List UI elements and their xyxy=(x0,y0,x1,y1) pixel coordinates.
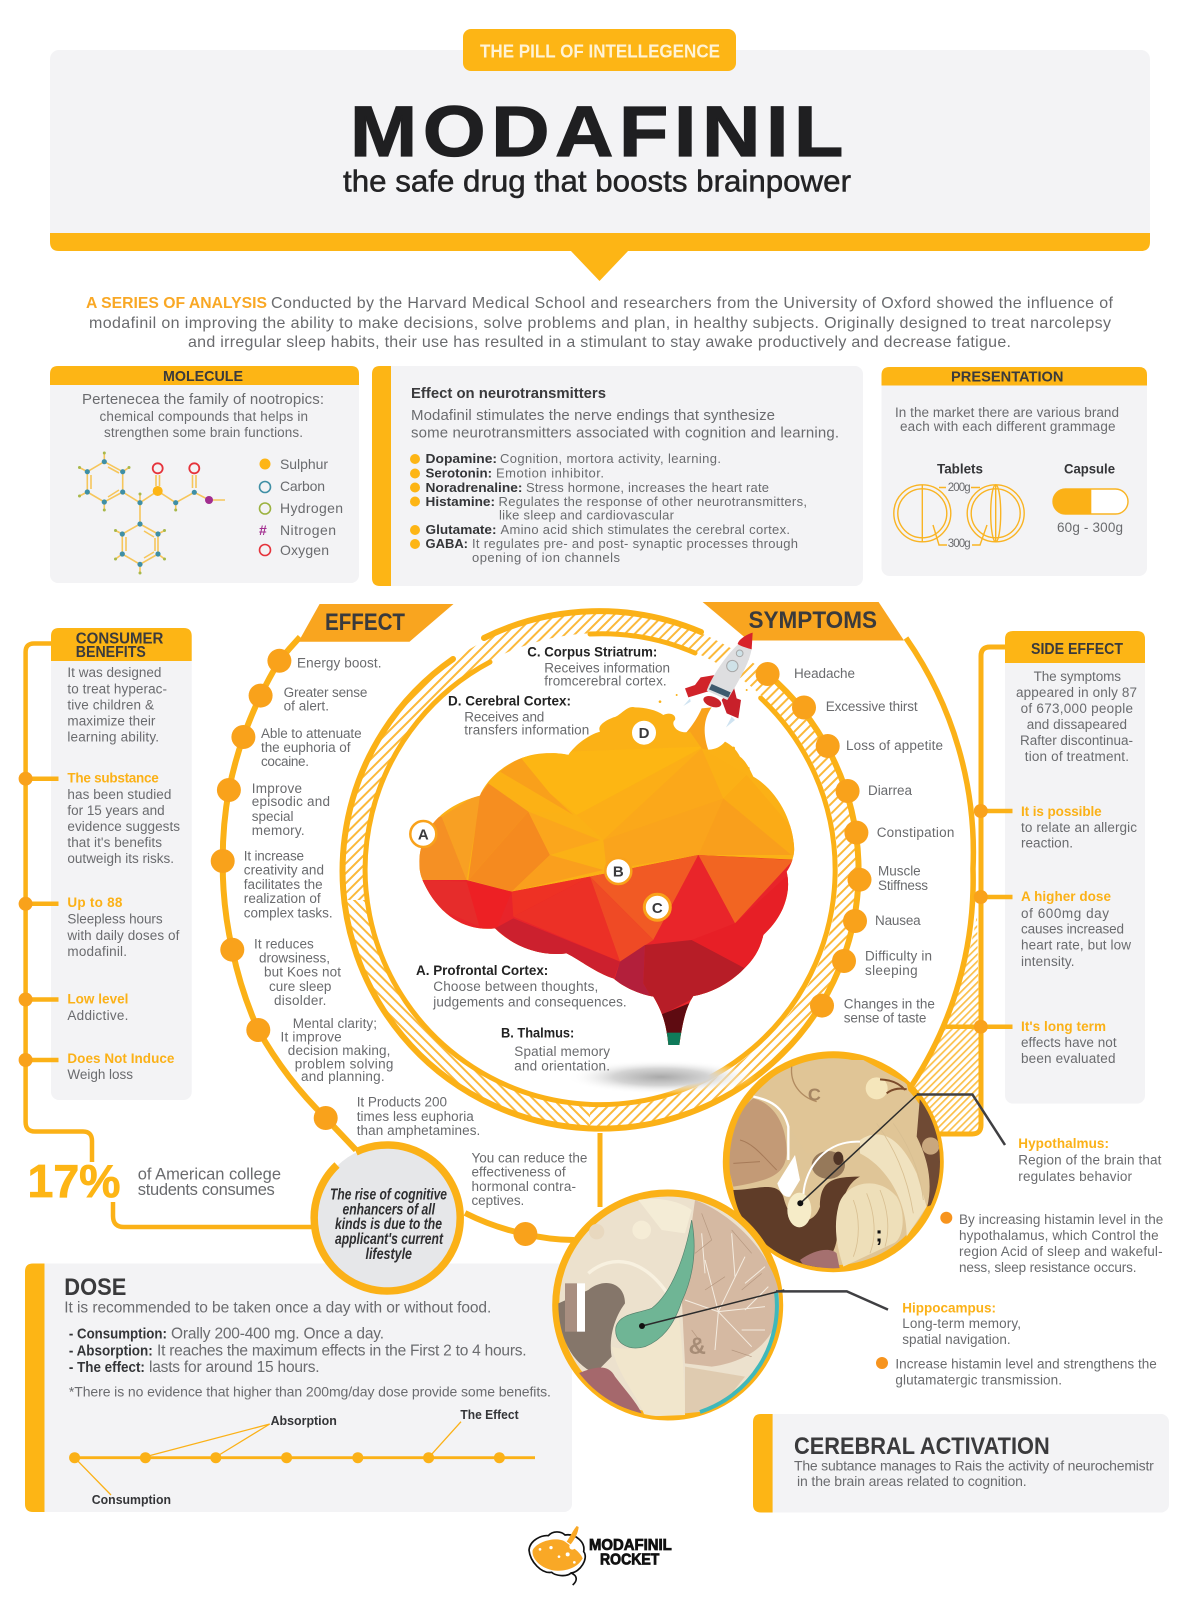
effect connector and dots xyxy=(211,637,356,1150)
neurotransmitter list: It regulates pre- and post- synaptic processes through xyxy=(472,536,798,551)
panel: presentation: 200g xyxy=(948,482,971,494)
symptom dots xyxy=(756,662,872,1018)
panel: consumer benefits: for 15 years and xyxy=(67,803,165,818)
panel: consumer benefits xyxy=(19,628,192,1162)
effect labels: drowsiness, xyxy=(259,951,330,966)
effect labels: and planning. xyxy=(301,1069,385,1084)
neurotransmitter list xyxy=(410,451,807,565)
panel: molecule: Pertenecea the family of nootropics: xyxy=(82,391,324,408)
neurotransmitter list: Dopamine: xyxy=(426,451,497,466)
effect labels xyxy=(244,656,480,1138)
panel: consumer benefits: learning ability. xyxy=(67,730,159,744)
icon: tablets xyxy=(894,485,1024,545)
panel: side effect: The symptoms xyxy=(1034,669,1121,684)
effect labels: It Products 200 xyxy=(357,1095,447,1110)
panel: presentation: 300g xyxy=(948,538,971,550)
illustration: hippocampus slice: & xyxy=(689,1333,706,1360)
neurotransmitter list: Stress hormone, increases the heart rate xyxy=(526,480,769,495)
brain shadow xyxy=(566,1060,756,1094)
brain markers A B C D: D xyxy=(639,725,650,742)
timeline: benefits connector xyxy=(19,644,92,1162)
panel: cerebral activation: in the brain areas related to cognition. xyxy=(797,1473,1027,1489)
panel: side effect: reaction. xyxy=(1021,836,1073,851)
panel: consumer benefits: Low level xyxy=(67,992,128,1007)
symptom labels: Loss of appetite xyxy=(846,738,943,753)
molecule legend: # xyxy=(259,522,267,538)
brain region labels: Spatial memory xyxy=(514,1044,610,1059)
panel: consumer benefits: to treat hyperac- xyxy=(67,681,167,696)
dose timeline chart: The Effect xyxy=(460,1408,519,1422)
callout: rise of cognitive enhancers: lifestyle xyxy=(366,1246,412,1263)
effect labels: It increase xyxy=(244,849,304,864)
effect labels: special xyxy=(252,809,294,824)
stat: 17 percent: of American college xyxy=(138,1165,281,1183)
panel: header xyxy=(50,29,1150,281)
text: hypothalamus: Region of the brain that xyxy=(1018,1153,1162,1168)
neurotransmitter list: Regulates the response of other neurotransmitters, xyxy=(498,494,807,509)
panel: presentation: PRESENTATION xyxy=(951,368,1064,386)
panel: side effect: been evaluated xyxy=(1021,1051,1116,1066)
text: hippocampus: Increase histamin level and strengthens the xyxy=(895,1357,1157,1372)
effect labels: memory. xyxy=(252,823,305,838)
panel: side effect: A higher dose xyxy=(1021,889,1111,904)
effect labels: Improve xyxy=(252,781,302,796)
panel: effect on neurotransmitters: Modafinil stimulates the nerve endings that synthesize xyxy=(411,407,775,424)
text: hypothalamus: regulates behavior xyxy=(1018,1169,1132,1184)
callout: rise of cognitive enhancers: applicant's current xyxy=(335,1231,444,1248)
panel: consumer benefits: modafinil. xyxy=(67,944,127,959)
intro paragraph: Conducted by the Harvard Medical School and researchers from the University of Oxford showed the influence of xyxy=(271,295,1114,312)
neurotransmitter list: Amino acid shich stimulates the cerebral cortex. xyxy=(500,522,790,537)
neurotransmitter list: opening of ion channels xyxy=(472,550,620,565)
symptom labels: Constipation xyxy=(877,825,954,840)
symptom labels: sense of taste xyxy=(844,1010,926,1026)
molecule legend: Sulphur xyxy=(280,456,328,472)
panel: presentation: Capsule xyxy=(1064,462,1115,476)
effect labels: creativity and xyxy=(244,863,324,878)
note: hormonal contraceptives: ceptives. xyxy=(472,1193,524,1208)
text: hypothalamus: By increasing histamin level in the xyxy=(959,1212,1163,1227)
timeline: side effect branches xyxy=(946,804,1012,1034)
effect labels: than amphetamines. xyxy=(357,1123,480,1138)
panel: side effect: appeared in only 87 xyxy=(1016,685,1137,700)
panel: consumer benefits: tive children & xyxy=(67,697,154,712)
text: hippocampus: spatial navigation. xyxy=(902,1332,1011,1347)
intro paragraph xyxy=(86,295,1114,351)
neurotransmitter list: Histamine: xyxy=(426,494,495,509)
brain region labels: and orientation. xyxy=(514,1059,610,1074)
callout: rise of cognitive enhancers: The rise of cognitive xyxy=(330,1186,447,1203)
dose timeline chart: Consumption xyxy=(92,1493,171,1507)
brain region labels: transfers information xyxy=(464,722,589,737)
effect labels: It improve xyxy=(280,1030,342,1045)
panel: effect on neurotransmitters: Effect on neurotransmitters xyxy=(411,386,606,402)
neurotransmitter list: like sleep and cardiovascular xyxy=(499,508,675,523)
panel: dose: - Consumption: xyxy=(69,1326,167,1343)
panel: consumer benefits: It was designed xyxy=(67,665,161,680)
effect labels: Able to attenuate xyxy=(261,726,362,741)
panel: dose: lasts for around 15 hours. xyxy=(149,1359,320,1376)
icon: rocket xyxy=(683,633,753,727)
note: hormonal contraceptives: You can reduce the xyxy=(472,1151,587,1166)
text: hypothalamus: Hypothalmus: xyxy=(1018,1136,1109,1151)
leader line: hippocampus xyxy=(776,1291,888,1310)
neurotransmitter list: Noradrenaline: xyxy=(426,480,522,495)
brain region labels: C. Corpus Striatrum: xyxy=(527,644,657,660)
intro paragraph: and irregular sleep habits, their use has resulted in a stimulant to stay awake productively and decrease fatigue. xyxy=(188,334,1011,351)
effect labels: of alert. xyxy=(284,698,329,714)
symptom labels: Nausea xyxy=(875,913,921,928)
panel: side effect: effects have not xyxy=(1021,1035,1117,1050)
neurotransmitter list: Serotonin: xyxy=(426,466,492,481)
effect labels: times less euphoria xyxy=(357,1109,474,1124)
panel: consumer benefits: BENEFITS xyxy=(76,644,146,661)
brain region labels: A. Profrontal Cortex: xyxy=(416,962,548,978)
logo: modafinil rocket: MODAFINIL xyxy=(589,1537,672,1554)
panel: side effect: It's long term xyxy=(1021,1019,1106,1034)
brain markers A B C D: B xyxy=(613,864,624,880)
text: hypothalamus: region Acid of sleep and wakeful- xyxy=(959,1244,1163,1259)
dose timeline chart xyxy=(69,1408,535,1507)
panel: consumer benefits: outweigh its risks. xyxy=(67,851,174,866)
subtitle: the safe drug that boosts brainpower xyxy=(343,164,851,198)
symptom labels: Muscle xyxy=(878,864,921,878)
panel: side effect xyxy=(946,631,1145,1104)
effect labels: cure sleep xyxy=(269,979,331,994)
panel: dose: DOSE xyxy=(64,1274,126,1301)
panel: dose: *There is no evidence that higher than 200mg/day dose provide some benefits. xyxy=(69,1384,551,1400)
panel: consumer benefits: Weigh loss xyxy=(67,1067,133,1082)
brain markers A B C D: C xyxy=(652,900,663,917)
symptom labels: Difficulty in xyxy=(865,948,932,964)
panel: side effect: Rafter discontinua- xyxy=(1020,733,1133,748)
illustration: hypothalamus slice xyxy=(726,1055,944,1270)
effect labels: Mental clarity; xyxy=(293,1016,377,1031)
brain region labels: Choose between thoughts, xyxy=(433,979,598,994)
panel: side effect: tion of treatment. xyxy=(1025,749,1129,764)
effect labels: realization of xyxy=(244,891,321,906)
symptom labels: Changes in the xyxy=(844,997,935,1012)
panel: side effect: and dissapeared xyxy=(1027,717,1127,732)
effect labels: It reduces xyxy=(254,937,314,952)
title: MODAFINIL xyxy=(350,93,849,172)
panel: dose: - Absorption: xyxy=(69,1342,153,1359)
stat: 17 percent: students consumes xyxy=(138,1181,275,1199)
brain region labels: B. Thalmus: xyxy=(501,1025,574,1041)
effect labels: but Koes not xyxy=(264,964,341,980)
panel: presentation: 60g - 300g xyxy=(1057,520,1123,535)
effect labels: disolder. xyxy=(274,993,326,1008)
symptoms outer connector and hatch xyxy=(906,638,1005,1134)
panel: effect on neurotransmitters xyxy=(372,366,863,586)
panel: side effect: causes increased xyxy=(1021,922,1124,937)
text: hypothalamus: ness, sleep resistance occurs. xyxy=(959,1260,1136,1275)
logo: modafinil rocket xyxy=(529,1526,672,1585)
panel: consumer benefits: Does Not Induce xyxy=(67,1051,175,1066)
panel: side effect: intensity. xyxy=(1021,954,1074,969)
panel: cerebral activation: CEREBRAL ACTIVATION xyxy=(794,1433,1050,1460)
panel: consumer benefits: Addictive. xyxy=(67,1008,128,1023)
symptom labels: Stiffness xyxy=(878,878,928,893)
panel: side effect: heart rate, but low xyxy=(1021,938,1131,953)
effect labels: complex tasks. xyxy=(244,906,333,921)
panel: dose: Orally 200-400 mg. Once a day. xyxy=(171,1326,384,1343)
panel: molecule: strengthen some brain functions. xyxy=(104,425,303,440)
stat: 17 percent xyxy=(28,1155,315,1227)
text: hippocampus: Long-term memory, xyxy=(902,1316,1021,1331)
intro paragraph: modafinil on improving the ability to make decisions, solve problems and plan, in healthy subjects. Originally designed to treat narcolepsy xyxy=(89,315,1111,332)
panel: presentation: each with each different grammage xyxy=(900,419,1116,434)
text: hippocampus xyxy=(876,1300,1157,1388)
tag: the pill of intellegence: THE PILL OF INTELLEGENCE xyxy=(480,40,720,62)
effect labels: problem solving xyxy=(295,1056,393,1071)
illustration: hypothalamus slice: ; xyxy=(875,1222,883,1247)
panel: molecule: MOLECULE xyxy=(163,368,243,385)
tag: the pill of intellegence xyxy=(463,29,736,71)
panel: dose: It reaches the maximum effects in the First 2 to 4 hours. xyxy=(157,1342,527,1359)
panel: molecule: chemical compounds that helps in xyxy=(100,409,308,424)
effect labels: episodic and xyxy=(252,794,330,809)
effect labels: Greater sense xyxy=(284,685,367,700)
panel: consumer benefits: has been studied xyxy=(67,787,171,802)
neurotransmitter list: Cognition, mortora activity, learning. xyxy=(500,451,721,466)
callout: rise of cognitive enhancers: kinds is due to the xyxy=(335,1216,442,1233)
brain region labels: fromcerebral cortex. xyxy=(544,674,667,689)
symptom labels: Excessive thirst xyxy=(826,699,918,714)
lines to hormonal note and slice xyxy=(465,1133,600,1240)
brain region labels xyxy=(416,644,670,1074)
panel: effect on neurotransmitters: some neurotransmitters associated with cognition and learning. xyxy=(411,424,839,442)
panel: consumer benefits: with daily doses of xyxy=(66,928,180,943)
callout: rise of cognitive enhancers xyxy=(314,1145,461,1291)
brain region labels: judgements and consequences. xyxy=(432,995,627,1010)
dose timeline chart: Absorption xyxy=(271,1414,337,1428)
panel: dose: - The effect: xyxy=(69,1359,145,1376)
symptom labels: Headache xyxy=(794,666,855,681)
callout: rise of cognitive enhancers: enhancers of all xyxy=(342,1201,436,1218)
panel: cerebral activation xyxy=(753,1414,1169,1512)
panel: consumer benefits: Sleepless hours xyxy=(67,912,163,927)
text: hypothalamus: hypothalamus, which Control the xyxy=(959,1228,1159,1243)
brain region labels: D. Cerebral Cortex: xyxy=(448,693,571,709)
molecule legend: Carbon xyxy=(280,478,325,494)
text: hippocampus: glutamatergic transmission. xyxy=(895,1373,1062,1388)
brain markers A B C D: A xyxy=(418,826,429,844)
panel: presentation xyxy=(882,367,1147,576)
panel: side effect: SIDE EFFECT xyxy=(1031,641,1123,658)
neurotransmitter list: GABA: xyxy=(426,536,468,551)
text: hypothalamus xyxy=(940,1136,1163,1275)
illustration: hypothalamus slice: C xyxy=(808,1085,821,1105)
neurotransmitter list: Emotion inhibitor. xyxy=(496,466,604,481)
effect labels: facilitates the xyxy=(244,877,323,892)
panel: side effect: of 673,000 people xyxy=(1021,701,1133,716)
panel: side effect: to relate an allergic xyxy=(1021,820,1137,835)
panel: molecule xyxy=(50,366,359,583)
banner: symptoms: SYMPTOMS xyxy=(748,607,877,634)
note: hormonal contraceptives xyxy=(472,1151,587,1208)
panel: consumer benefits: evidence suggests xyxy=(67,819,180,834)
molecule legend: Oxygen xyxy=(280,542,329,558)
logo: modafinil rocket: ROCKET xyxy=(600,1551,660,1568)
panel: consumer benefits: Up to 88 xyxy=(67,895,123,910)
effect labels: the euphoria of xyxy=(261,740,351,755)
illustration: hippocampus slice xyxy=(556,1193,784,1417)
effect labels: decision making, xyxy=(288,1043,390,1058)
panel: presentation: Tablets xyxy=(937,462,983,476)
molecule diagram xyxy=(78,452,225,574)
banner: effect: EFFECT xyxy=(325,609,405,636)
leader line: hypothalamus xyxy=(917,1094,1005,1145)
neurotransmitter list: Glutamate: xyxy=(426,522,496,537)
panel: cerebral activation: The subtance manages to Rais the activity of neurochemistr xyxy=(794,1457,1154,1473)
panel: consumer benefits: that it's benefits xyxy=(67,835,162,850)
stat: 17 percent: 17% xyxy=(28,1155,120,1207)
panel: consumer benefits: CONSUMER xyxy=(76,631,164,648)
banner: effect xyxy=(298,604,454,642)
molecule legend: Hydrogen xyxy=(280,500,343,516)
banner: symptoms xyxy=(703,602,904,640)
panel: side effect: of 600mg day xyxy=(1021,906,1109,921)
note: hormonal contraceptives: hormonal contra- xyxy=(472,1179,576,1194)
effect labels: Energy boost. xyxy=(297,656,382,671)
effect labels: cocaine. xyxy=(261,754,309,769)
symptom labels: sleeping xyxy=(865,963,918,978)
panel: dose: It is recommended to be taken once a day with or without food. xyxy=(64,1300,491,1317)
molecule legend: Nitrogen xyxy=(280,522,336,538)
note: hormonal contraceptives: effectiveness of xyxy=(472,1165,566,1180)
rings: hatched circle around brain xyxy=(343,611,859,1129)
intro paragraph: A SERIES OF ANALYSIS xyxy=(86,295,267,312)
panel: presentation: In the market there are various brand xyxy=(895,405,1119,420)
symptom labels: Diarrea xyxy=(868,783,912,798)
brain markers A B C D xyxy=(410,720,670,920)
icon: capsule xyxy=(1053,489,1128,514)
panel: consumer benefits: The substance xyxy=(67,770,159,786)
brain region labels: Receives and xyxy=(464,710,544,725)
molecule legend xyxy=(259,456,343,558)
symptom labels xyxy=(794,666,954,1026)
text: hippocampus: Hippocampus: xyxy=(902,1300,996,1316)
panel: dose xyxy=(25,1264,572,1512)
brain region labels: Receives information xyxy=(544,660,670,675)
panel: side effect: It is possible xyxy=(1021,804,1102,819)
brain illustration xyxy=(419,689,794,1045)
panel: consumer benefits: maximize their xyxy=(67,714,156,728)
